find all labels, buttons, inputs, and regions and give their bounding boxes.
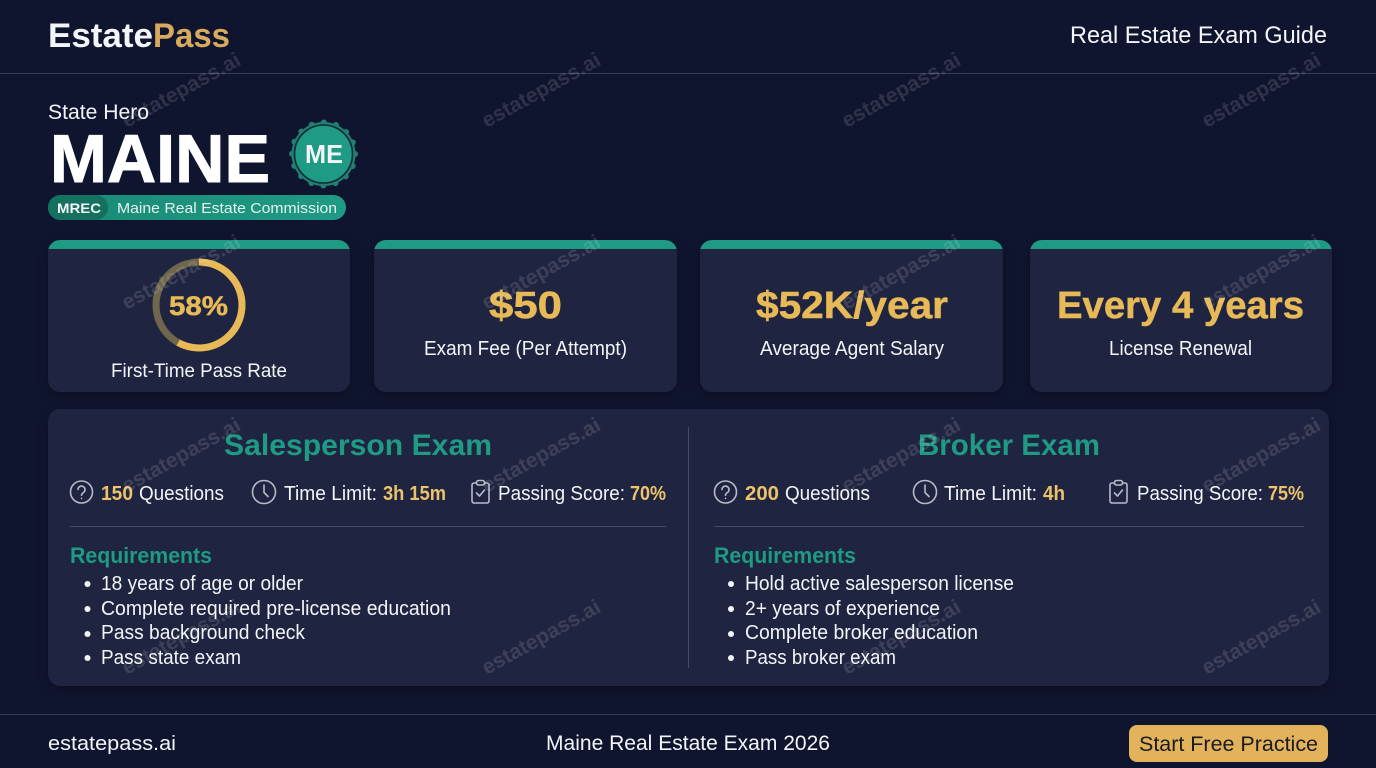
icon: question [714,481,736,503]
requirements list: Complete required pre-license education [101,598,451,620]
text: estatepass.ai [1198,230,1325,314]
requirements list [728,573,1014,669]
eyebrow label: State Hero [48,101,149,124]
text: estatepass.ai [118,413,245,497]
stat card: renewal [1030,240,1332,392]
text: estatepass.ai [838,230,965,314]
button: start free practice: Start Free Practice [1139,733,1318,756]
stat value: $50 [489,285,562,327]
fact: time limit: Time Limit: [284,483,377,505]
text: estatepass.ai [1198,413,1325,497]
fact: time limit: 3h 15m [383,483,446,505]
text: estatepass.ai [1198,595,1325,679]
logo: EstatePass: EstatePass [48,17,230,55]
commission pill: Maine Real Estate Commission [117,200,337,217]
requirements heading: Requirements [714,543,856,568]
fact: time limit: Time Limit: [944,483,1037,505]
column: broker exam [714,429,1304,669]
button: start free practice [1129,725,1328,762]
fact: time limit: 4h [1043,483,1065,505]
text: estatepass.ai [838,413,965,497]
stat card: exam fee [374,240,677,392]
fact: questions: 200 [745,483,779,505]
state name heading: MAINE [50,121,270,197]
header title: Real Estate Exam Guide [1070,22,1327,49]
requirements list: Pass background check [101,622,306,644]
fact: passing score: Passing Score: [1137,483,1263,505]
donut chart: 58 percent: 58% [169,291,228,321]
text: estatepass.ai [478,230,605,314]
stat label: License Renewal [1109,338,1252,360]
requirements heading: Requirements [70,543,212,568]
fact: questions: Questions [785,483,870,505]
text: estatepass.ai [118,48,245,132]
state hero [48,101,356,220]
text: estatepass.ai [118,595,245,679]
requirements list: 18 years of age or older [101,573,303,595]
stat card: salary [700,240,1003,392]
fact: passing score: 70% [630,483,666,505]
footer site name: estatepass.ai [48,733,176,755]
text: estatepass.ai [478,413,605,497]
icon: clock [914,480,936,504]
text: estatepass.ai [118,230,245,314]
fact: questions: 150 [101,483,133,505]
stat card: pass rate [48,240,350,392]
heading: Broker Exam [918,429,1100,462]
heading: Salesperson Exam [224,429,492,462]
stat label: Exam Fee (Per Attempt) [424,338,627,360]
text: estatepass.ai [1198,48,1325,132]
stat value: Every 4 years [1057,285,1304,327]
footer bar [0,714,1376,762]
donut chart: 58 percent [156,262,242,348]
icon: state seal badge: ME [305,139,343,169]
requirements list: Hold active salesperson license [745,573,1014,595]
icon: clipboard [1110,480,1127,503]
icon: question [70,481,92,503]
stat value: $52K/year [756,285,948,327]
stat label: First-Time Pass Rate [111,361,287,382]
commission pill: MREC [57,200,101,216]
text: estatepass.ai [478,48,605,132]
requirements list [84,573,451,669]
text: estatepass.ai [478,595,605,679]
icon: clock [252,480,276,504]
footer title: Maine Real Estate Exam 2026 [546,732,830,755]
fact: questions: Questions [139,483,224,505]
text: estatepass.ai [838,595,965,679]
icon: state seal badge [292,122,356,186]
requirements list: 2+ years of experience [745,598,940,620]
requirements list: Pass state exam [101,647,241,669]
fact: passing score: 75% [1268,483,1304,505]
column: salesperson exam [70,429,666,669]
requirements list: Pass broker exam [745,647,896,669]
commission pill [48,195,346,220]
header bar [0,17,1376,74]
icon: clipboard [472,480,489,503]
panel: exam comparison [48,409,1329,686]
requirements list: Complete broker education [745,622,978,644]
stat label: Average Agent Salary [760,338,944,360]
text: estatepass.ai [838,48,965,132]
fact: passing score: Passing Score: [498,483,625,505]
